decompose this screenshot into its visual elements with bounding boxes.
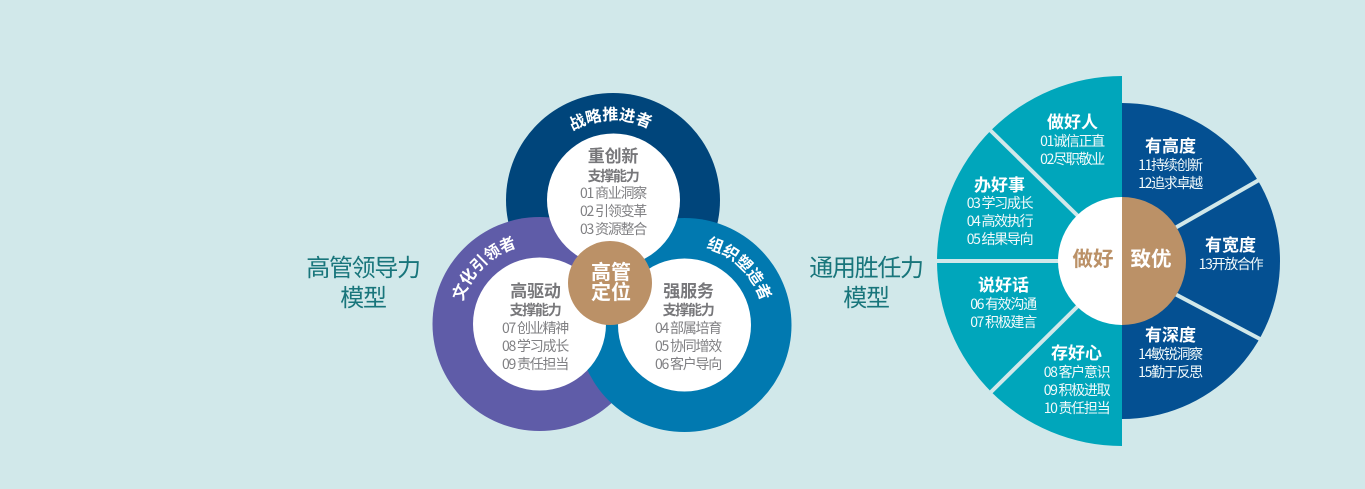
panel: 强服务: 06 客户导向 [655, 354, 721, 374]
sector: 办好事: 04 高效执行 [967, 211, 1034, 231]
center hub: 致优: 致优 [1130, 242, 1172, 272]
sector: 有高度: 有高度 [1145, 132, 1196, 157]
sector: 存好心 [1044, 339, 1111, 418]
ring: 组织塑造者: 组织塑造者 [706, 236, 772, 300]
panel: 高驱动: 09 责任担当 [502, 354, 568, 374]
sector: 存好心: 10 责任担当 [1044, 398, 1110, 418]
sector: 说好话 [970, 271, 1037, 332]
panel: 重创新: 02 引领变革 [580, 201, 647, 221]
sector: 办好事: 03 学习成长 [967, 193, 1034, 213]
ring: 组织塑造者 [588, 218, 792, 432]
center hub: 做好: 做好 [1072, 242, 1114, 272]
sector: 说好话: 说好话 [978, 271, 1029, 296]
sector: 做好人: 做好人 [1047, 108, 1098, 133]
panel: 重创新: 03 资源整合 [580, 219, 647, 239]
sector: 有深度: 14敏锐洞察 [1138, 344, 1203, 364]
sector: 有深度: 有深度 [1145, 321, 1196, 346]
divider lines [936, 130, 1260, 393]
sector: 做好人: 01诚信正直 [1040, 131, 1105, 151]
sector: 说好话: 07 积极建言 [970, 312, 1037, 332]
title: 通用胜任力模型: 模型 [843, 278, 889, 313]
panel: 高驱动: 07 创业精神 [502, 318, 568, 338]
panel: 高驱动: 08 学习成长 [502, 336, 569, 356]
center hub: 致优 [1122, 197, 1186, 325]
sector: 做好人 [1040, 108, 1105, 169]
center badge: 高管定位 [568, 241, 652, 325]
title: 通用胜任力模型 [809, 248, 923, 313]
sector: 存好心: 09 积极进取 [1044, 380, 1111, 400]
ring: 文化引领者: 文化引领者 [452, 236, 515, 301]
panel: 强服务: 05 协同增效 [655, 336, 722, 356]
panel: 高驱动 [473, 258, 606, 390]
sector: 做好人: 02尽职敬业 [1040, 149, 1105, 169]
sector: 说好话: 06 有效沟通 [970, 294, 1037, 314]
panel: 强服务: 04 部属培育 [655, 318, 722, 338]
panel: 高驱动: 支撑能力 [510, 300, 561, 320]
center badge: 高管定位: 高管 [591, 256, 631, 285]
sector: 办好事: 05 结果导向 [967, 229, 1033, 249]
sector: 有高度: 12追求卓越 [1138, 173, 1203, 193]
diagram: executive leadership venn [432, 93, 792, 432]
sector: 有高度 [1138, 132, 1203, 193]
center hub: 做好 [1058, 197, 1122, 325]
panel: 重创新: 支撑能力 [588, 166, 639, 186]
sector: 存好心: 08 客户意识 [1044, 362, 1111, 382]
ring: 战略推进者: 战略推进者 [570, 106, 652, 132]
sector: 有宽度: 13开放合作 [1199, 254, 1264, 274]
sector: 办好事 [967, 171, 1034, 249]
half disc: 致优 sector [1122, 103, 1280, 419]
center badge: 高管定位: 定位 [591, 276, 631, 305]
diagram: general competency model [936, 76, 1280, 446]
half disc: 做好 sector [937, 76, 1122, 446]
panel: 强服务: 强服务 [663, 277, 714, 302]
title: 通用胜任力模型: 通用胜任力 [809, 248, 923, 283]
panel: 重创新: 重创新 [588, 142, 638, 167]
ring: 战略推进者 [506, 93, 720, 224]
panel: 高驱动: 高驱动 [510, 277, 561, 302]
title: 高管领导力模型: 高管领导力 [306, 248, 420, 283]
sector: 有深度: 15勤于反思 [1138, 362, 1203, 382]
sector: 办好事: 办好事 [974, 171, 1025, 196]
ring: 文化引领者 [432, 217, 612, 431]
panel: 重创新: 01 商业洞察 [580, 183, 647, 203]
title: 高管领导力模型 [306, 248, 420, 313]
sector: 有深度 [1138, 321, 1203, 382]
panel: 强服务 [618, 258, 751, 392]
sector: 有宽度 [1199, 231, 1264, 274]
sector: 有宽度: 有宽度 [1205, 231, 1256, 256]
sector: 存好心: 存好心 [1051, 339, 1102, 364]
panel: 重创新 [547, 134, 680, 266]
sector: 有高度: 11持续创新 [1138, 155, 1203, 175]
panel: 强服务: 支撑能力 [663, 300, 714, 320]
title: 高管领导力模型: 模型 [340, 278, 386, 313]
